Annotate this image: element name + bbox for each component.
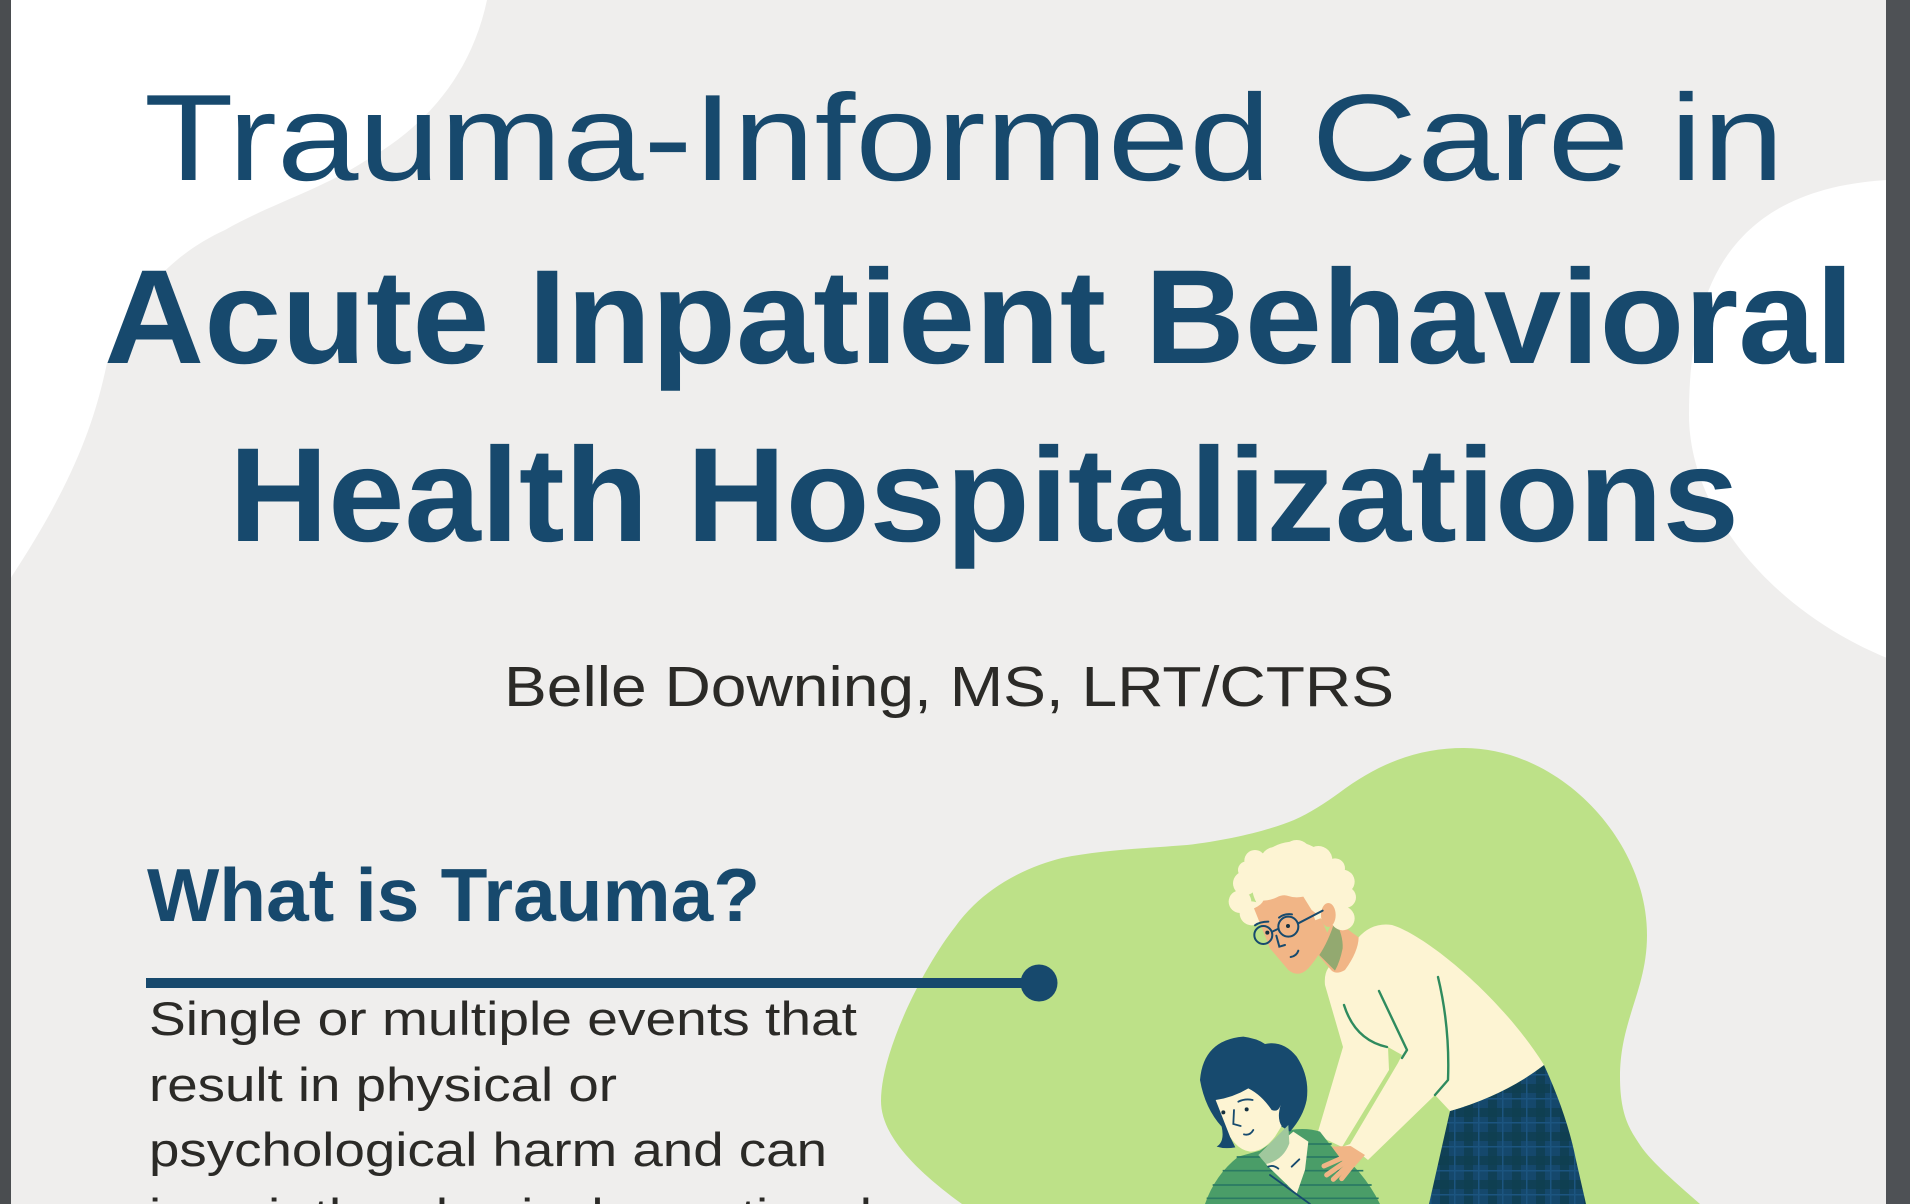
illustration: caregiver and patient: [1200, 840, 1586, 1204]
author line: Belle Downing, MS, LRT/CTRS: [504, 655, 1394, 719]
background shape: right white blob: [1689, 180, 1887, 658]
definition line 3: psychological harm and can: [149, 1123, 827, 1176]
heading: What is Trauma?: What is Trauma?: [147, 853, 760, 937]
caregiver's hand on shoulder: [1324, 1146, 1365, 1179]
title: [104, 70, 1854, 570]
connector line with dot: [146, 964, 1058, 1002]
patient's shirt, face and hair: [1200, 1037, 1380, 1204]
older woman's sweater and arms: [1317, 925, 1544, 1160]
older woman's head, hair and glasses: [1229, 840, 1359, 974]
title line 3: Health Hospitalizations: [229, 421, 1739, 570]
background shape: top-left white blob: [11, 0, 487, 578]
left page edge: [0, 0, 11, 1204]
title line 1: Trauma-Informed Care in: [144, 70, 1784, 207]
definition text block: [149, 992, 872, 1204]
definition line 1: Single or multiple events that: [149, 992, 857, 1045]
right page edge: [1886, 0, 1910, 1204]
green blob illustration background: [881, 748, 1700, 1204]
older woman's skirt: [1429, 1065, 1586, 1204]
title line 2: Acute Inpatient Behavioral: [104, 243, 1854, 392]
definition line 2: result in physical or: [149, 1058, 617, 1111]
